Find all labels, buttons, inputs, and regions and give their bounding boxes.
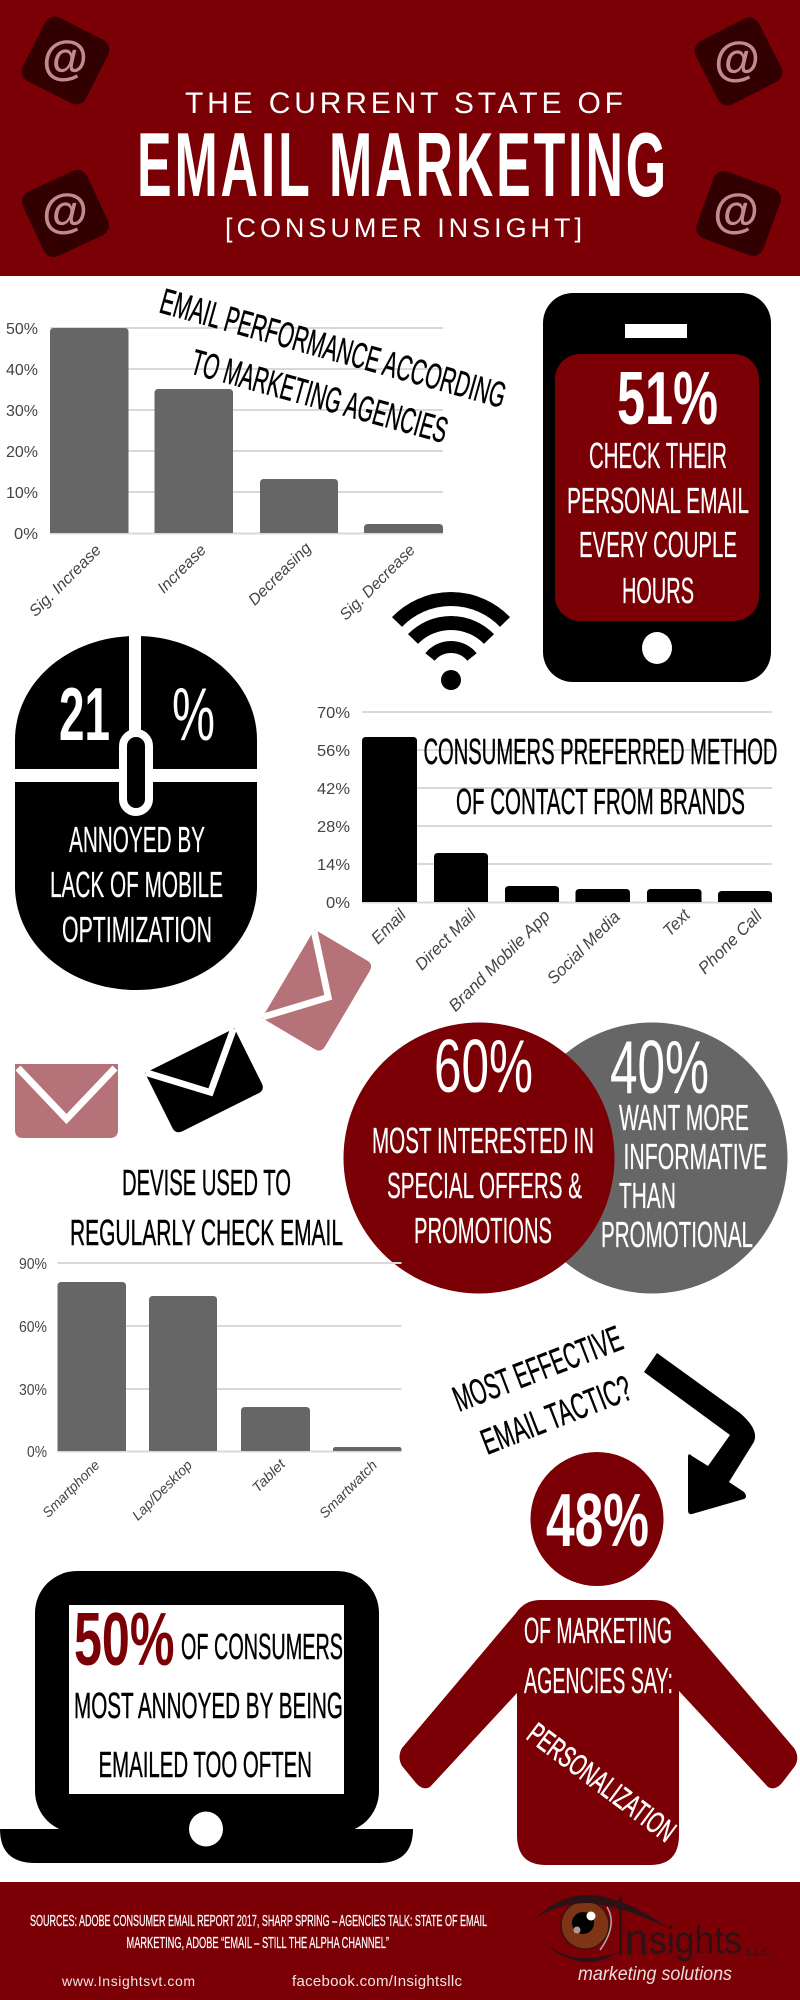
footer band: [0, 1879, 800, 2000]
y axis labels: 42%: [317, 781, 350, 798]
y axis labels: 0%: [326, 895, 350, 912]
icon: at tile top left: [18, 13, 113, 108]
icon: black envelope: [145, 1028, 265, 1135]
laptop caption: EMAILED TOO OFTEN: [98, 1744, 312, 1785]
icon: wifi: [397, 599, 505, 690]
y axis labels: 90%: [19, 1256, 47, 1273]
y axis labels: [19, 1256, 47, 1461]
logo: insights: marketing solutions: [578, 1964, 732, 1985]
chart three title: REGULARLY CHECK EMAIL: [70, 1212, 343, 1253]
title line one: THE CURRENT STATE OF: [185, 87, 623, 120]
chart one title: TO MARKETING AGENCIES: [187, 341, 452, 451]
y axis labels: 10%: [6, 485, 38, 502]
stat: 21%: [59, 672, 215, 756]
bar chart: devices: [19, 1256, 402, 1523]
icon: computer mouse with 21% stat: [15, 634, 257, 990]
x axis labels: Increase: [155, 542, 210, 597]
sources text: [30, 1913, 487, 1952]
sweater caption: [524, 1610, 673, 1701]
header banner: [0, 0, 800, 276]
y axis labels: 14%: [317, 857, 350, 874]
x axis labels: Phone Call: [694, 906, 767, 978]
x axis labels: Sig. Increase: [26, 542, 105, 620]
icon: at tile top right: @: [714, 32, 760, 85]
y axis labels: [6, 321, 38, 543]
bar chart: preferred contact method: [317, 705, 772, 1015]
sources text: MARKETING, ADOBE “EMAIL – STILL THE ALPHA CHANNEL”: [126, 1935, 389, 1952]
question text: most effective tactic: MOST EFFECTIVE: [447, 1317, 628, 1419]
mouse caption: [50, 819, 223, 950]
stat: 60%: 60%: [434, 1024, 533, 1108]
venn diagram: [344, 1022, 788, 1294]
chart one title: [156, 280, 511, 451]
mouse caption: ANNOYED BY: [69, 819, 205, 860]
chart three title: [70, 1162, 343, 1253]
chart one title: EMAIL PERFORMANCE ACCORDING: [156, 280, 511, 416]
icon: at tile bottom left: @: [42, 184, 88, 237]
icon: pink envelope rotated: [262, 929, 374, 1053]
website: www.Insightsvt.com: [61, 1973, 195, 1989]
mouse caption: OPTIMIZATION: [62, 909, 212, 950]
y axis labels: [317, 705, 350, 912]
x axis labels: Decreasing: [246, 540, 315, 609]
logo: insights: L.L.C.: [747, 1947, 772, 1958]
question text: most effective tactic: EMAIL TACTIC?: [475, 1367, 637, 1462]
bars: [58, 1282, 402, 1451]
caption: promotions: MOST INTERESTED IN: [372, 1120, 594, 1161]
y axis labels: 0%: [27, 1444, 47, 1461]
x axis labels: [26, 540, 419, 624]
x axis labels: [39, 1455, 380, 1523]
facebook: facebook.com/Insightsllc: [292, 1973, 462, 1990]
stat: 50%: 50%: [74, 1597, 174, 1681]
stat: 40%: 40%: [610, 1025, 709, 1109]
icon: at tile bottom left: [18, 166, 113, 261]
caption: informative: [601, 1097, 767, 1255]
chart two title: [424, 731, 778, 822]
laptop caption: [74, 1626, 343, 1785]
phone caption: HOURS: [622, 570, 694, 611]
mouse caption: LACK OF MOBILE: [50, 864, 223, 905]
caption: promotions: SPECIAL OFFERS &: [387, 1165, 582, 1206]
x axis labels: Text: [659, 905, 695, 940]
caption: informative: THAN: [619, 1175, 676, 1216]
y axis labels: 60%: [19, 1319, 47, 1336]
logo: insights: [535, 1879, 772, 1985]
stat: 21%: %: [172, 672, 215, 756]
sweater caption: AGENCIES SAY:: [524, 1660, 673, 1701]
y axis labels: 40%: [6, 362, 38, 379]
logo: insights: n: [625, 1914, 648, 1965]
bars: [50, 328, 443, 533]
bars: [362, 737, 772, 902]
x axis labels: Smartwatch: [316, 1457, 380, 1521]
caption: promotions: PROMOTIONS: [414, 1210, 552, 1251]
logo: insights: sights: [649, 1920, 742, 1962]
logo: insights: I: [616, 1879, 625, 1973]
x axis labels: Lap/Desktop: [129, 1457, 195, 1523]
icon: at tile top left: @: [42, 31, 88, 84]
x axis labels: Social Media: [543, 907, 624, 988]
y axis labels: 30%: [6, 403, 38, 420]
x axis labels: Email: [367, 905, 411, 948]
x axis labels: Direct Mail: [411, 905, 481, 974]
laptop caption: MOST ANNOYED BY BEING: [74, 1685, 343, 1726]
x axis labels: [367, 905, 767, 1015]
y axis labels: 30%: [19, 1382, 47, 1399]
y axis labels: 20%: [6, 444, 38, 461]
x axis labels: Sig. Decrease: [337, 542, 419, 624]
sweater figure: [400, 1600, 797, 1865]
phone caption: [567, 435, 749, 611]
caption: promotions: [372, 1120, 594, 1251]
icon: pink envelope flat: [15, 1064, 118, 1138]
laptop caption: OF CONSUMERS: [181, 1626, 343, 1667]
stat circle: 48%: [530, 1452, 664, 1586]
stat circle: 48%: 48%: [546, 1478, 649, 1562]
y axis labels: 70%: [317, 705, 350, 722]
icon: at tile bottom right: [693, 168, 784, 259]
x axis labels: Smartphone: [39, 1457, 103, 1520]
stat: 21%: 21: [59, 672, 110, 756]
y axis labels: 28%: [317, 819, 350, 836]
icon: at tile top right: [691, 14, 786, 109]
sweater tactic label: PERSONALIZATION: [521, 1717, 682, 1849]
chart three title: DEVISE USED TO: [122, 1162, 291, 1203]
y axis labels: 50%: [6, 321, 38, 338]
icon: laptop with 50% stat: [0, 1571, 413, 1863]
icon: at tile bottom right: @: [713, 184, 759, 237]
stat: 51%: 51%: [617, 356, 718, 440]
x axis labels: Brand Mobile App: [445, 906, 554, 1015]
x axis labels: Tablet: [249, 1455, 289, 1495]
subtitle: [CONSUMER INSIGHT]: [225, 213, 582, 243]
arrow: [644, 1353, 755, 1514]
question text: most effective tactic: [447, 1317, 637, 1462]
bar chart: email performance: [6, 321, 443, 624]
y axis labels: 0%: [14, 526, 38, 543]
icon: phone with 51% stat: [543, 293, 771, 682]
sweater caption: OF MARKETING: [524, 1610, 672, 1651]
y axis labels: 56%: [317, 743, 350, 760]
